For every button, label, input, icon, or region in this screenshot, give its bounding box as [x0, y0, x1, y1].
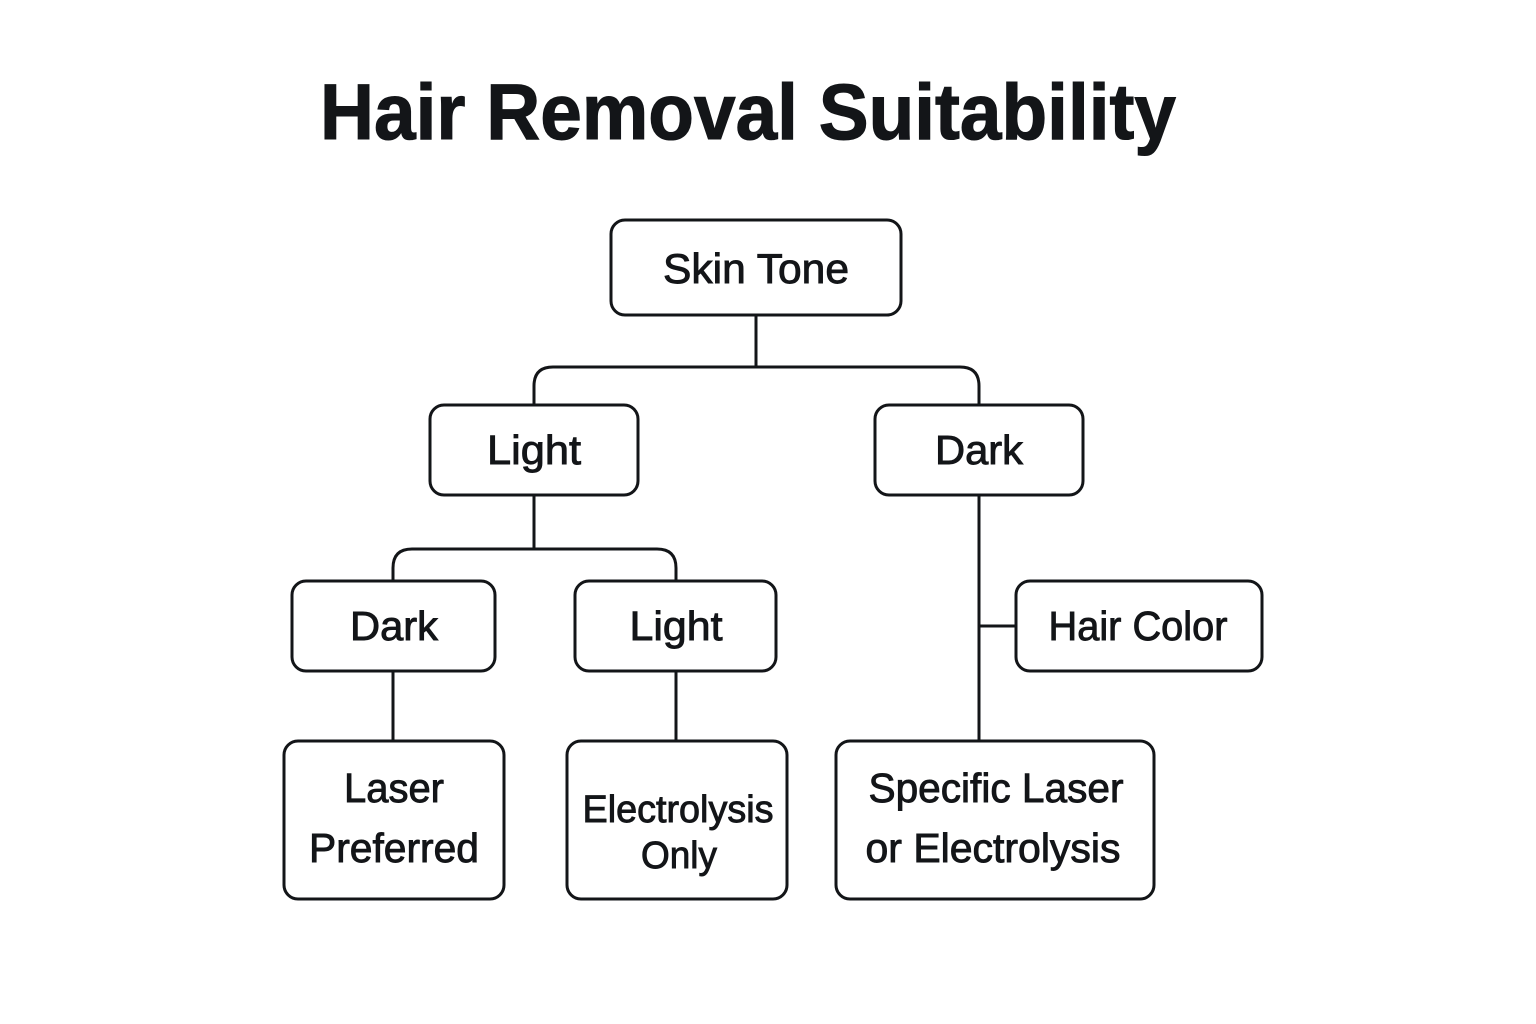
node: light hair: Light	[630, 603, 723, 649]
node: specific laser or electrolysis	[836, 741, 1154, 899]
node: light skin	[430, 405, 638, 495]
node: electrolysis only: Only	[641, 835, 717, 877]
node: dark hair	[292, 581, 495, 671]
title: Hair Removal Suitability	[320, 67, 1176, 156]
connector: light to hair color options	[393, 495, 676, 581]
node: skin tone: Skin Tone	[663, 245, 849, 292]
node: light hair	[575, 581, 776, 671]
node: electrolysis only: Electrolysis	[582, 789, 774, 831]
connector: skin tone to light and dark	[534, 315, 979, 405]
node: hair color: Hair Color	[1048, 603, 1228, 649]
node: dark skin: Dark	[935, 427, 1023, 473]
connector: light hair to electrolysis only	[674, 671, 678, 741]
node: specific laser or electrolysis: or Electrolysis	[866, 825, 1120, 871]
node: electrolysis only	[567, 741, 787, 899]
node: dark skin	[875, 405, 1083, 495]
node: light skin: Light	[487, 427, 582, 473]
node: laser preferred: Laser	[344, 765, 444, 811]
node: laser preferred	[284, 741, 504, 899]
node: skin tone	[611, 220, 901, 315]
connector: dark skin to specific laser	[978, 495, 980, 741]
node: specific laser or electrolysis: Specific Laser	[868, 765, 1124, 811]
node: hair color	[1016, 581, 1262, 671]
connector: dark skin to hair color	[979, 624, 1016, 628]
connector: dark hair to laser preferred	[392, 671, 394, 741]
node: laser preferred: Preferred	[309, 825, 479, 871]
node: dark hair: Dark	[350, 603, 438, 649]
